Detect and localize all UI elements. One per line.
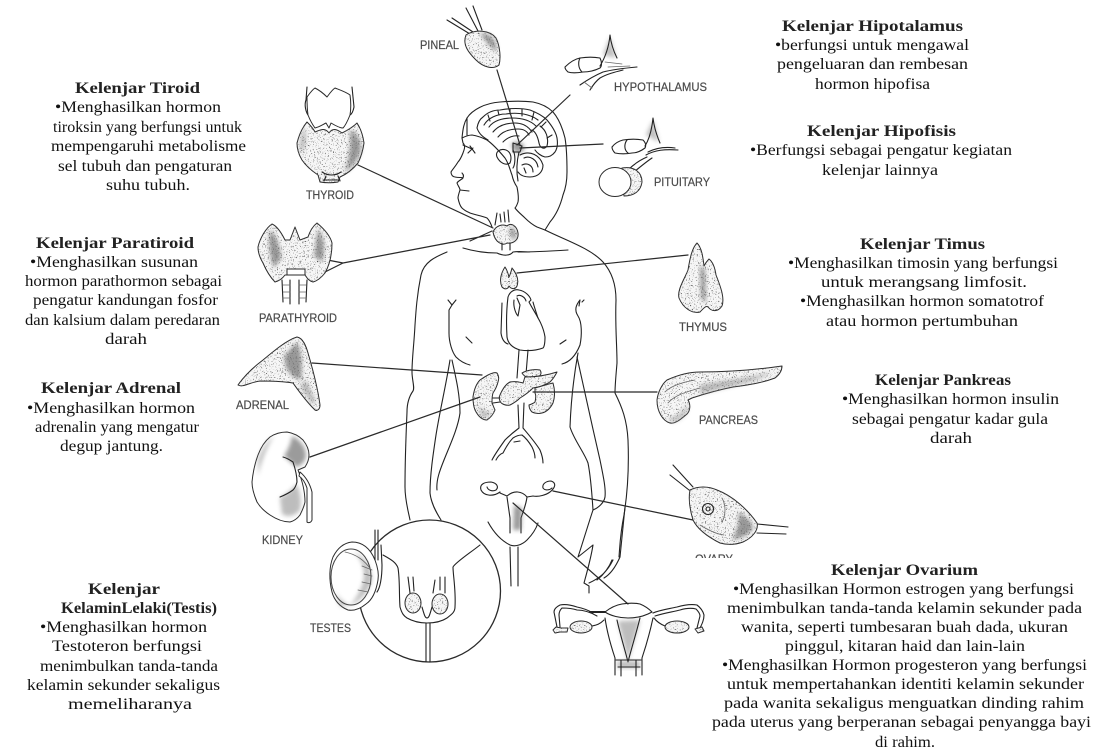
iliac arteries (492, 403, 543, 463)
small pancreas (499, 372, 557, 405)
text block: Kelenjar Paratiroid: •Menghasilkan susunan (30, 254, 198, 271)
anatomical diagram (236, 6, 788, 676)
text block: Kelenjar Tiroid: •Menghasilkan hormon (55, 99, 221, 116)
icon: adrenal (238, 337, 320, 410)
text block: Kelenjar Paratiroid: pengatur kandungan fosfor (33, 292, 219, 309)
text block: Kelenjar Kelamin Lelaki: Testoteron berfungsi (52, 638, 203, 655)
label: thyroid: THYROID (306, 190, 354, 202)
text block: Kelenjar Timus: untuk merangsang limfosit. (821, 274, 1027, 291)
text block: Kelenjar Pankreas (842, 372, 1059, 447)
text block: Kelenjar Tiroid: mempengaruhi metabolisme (51, 138, 246, 155)
icon: pituitary (599, 118, 678, 196)
icon: thymus (679, 243, 723, 312)
body figure outline (405, 101, 628, 593)
text block: Kelenjar Hipotalamus: hormon hipofisa (815, 76, 930, 93)
text block: Kelenjar Paratiroid: darah (105, 331, 147, 348)
label: hypothalamus: HYPOTHALAMUS (614, 82, 707, 94)
icon: large uterus (553, 603, 704, 676)
text block: Kelenjar Pankreas: darah (930, 430, 972, 447)
text block: Kelenjar Hipofisis: Kelenjar Hipofisis (807, 123, 956, 140)
label: pancreas: PANCREAS (699, 415, 758, 427)
label: ovary (cropped): OVARY (695, 554, 733, 566)
text block: Kelenjar Tiroid: Kelenjar Tiroid (75, 80, 200, 97)
text block: Kelenjar Kelamin Lelaki: KelaminLelaki(Testis) (61, 600, 217, 617)
text block: Kelenjar Timus: atau hormon pertumbuhan (826, 313, 1018, 330)
text block: Kelenjar Adrenal: degup jantung. (60, 438, 163, 455)
text block: Kelenjar Ovarium (712, 562, 1092, 751)
icon: kidney (252, 432, 312, 523)
small right kidney (529, 383, 554, 413)
text block: Kelenjar Pankreas: sebagai pengatur kadar gula (852, 411, 1048, 428)
text block: Kelenjar Ovarium: •Menghasilkan Hormon estrogen yang berfungsi (733, 581, 1075, 598)
text block: Kelenjar Ovarium: Kelenjar Ovarium (831, 562, 978, 579)
text block: Kelenjar Timus: •Menghasilkan hormon somatotrof (800, 293, 1045, 310)
label: thymus: THYMUS (679, 322, 727, 334)
text block: Kelenjar Pankreas: Kelenjar Pankreas (875, 372, 1011, 389)
icon: pancreas (657, 366, 782, 423)
text block: Kelenjar Ovarium: untuk mempertahankan identiti kelamin sekunder (727, 676, 1085, 693)
text block: Kelenjar Kelamin Lelaki (27, 581, 220, 713)
small thyroid (493, 224, 518, 244)
icon: pineal gland (447, 6, 500, 67)
text block: Kelenjar Pankreas: •Menghasilkan hormon insulin (842, 391, 1059, 408)
text block: Kelenjar Hipotalamus (775, 18, 969, 93)
text block: Kelenjar Adrenal: Kelenjar Adrenal (41, 380, 182, 397)
heart (507, 290, 545, 351)
text block: Kelenjar Ovarium: wanita, seperti tumbesaran buah dada, ukuran (741, 619, 1068, 636)
text block: Kelenjar Hipofisis (750, 123, 1012, 179)
text block: Kelenjar Timus: Kelenjar Timus (860, 236, 985, 253)
icon: hypothalamus (565, 35, 637, 90)
text block: Kelenjar Ovarium: pinggul, kitaran haid dan lain-lain (785, 638, 1025, 655)
small organs in torso (463, 210, 568, 463)
small upper pancreas lobe (522, 370, 541, 378)
text block: Kelenjar Ovarium: menimbulkan tanda-tanda kelamin sekunder pada (727, 600, 1082, 617)
icon: thyroid (297, 87, 364, 183)
text block: Kelenjar Tiroid: suhu tubuh. (106, 177, 190, 194)
icon: ovary (670, 465, 788, 544)
text block: Kelenjar Adrenal (27, 380, 200, 455)
text block: Kelenjar Ovarium: •Menghasilkan Hormon progesteron yang berfungsi (722, 657, 1088, 674)
text block: Kelenjar Paratiroid: hormon parathormon sebagai (25, 273, 223, 290)
text block: Kelenjar Kelamin Lelaki: Kelenjar (88, 581, 160, 598)
text block: Kelenjar Hipotalamus: Kelenjar Hipotalamus (782, 18, 963, 35)
icon: parathyroid (258, 223, 332, 304)
text block: Kelenjar Tiroid: sel tubuh dan pengaturan (58, 158, 232, 175)
connector lines (310, 70, 693, 604)
text block: Kelenjar Hipotalamus: •berfungsi untuk mengawal (775, 37, 969, 54)
text block: Kelenjar Kelamin Lelaki: •Menghasilkan hormon (40, 619, 207, 636)
text block: Kelenjar Hipofisis: •Berfungsi sebagai pengatur kegiatan (750, 142, 1012, 159)
text block: Kelenjar Adrenal: •Menghasilkan hormon (27, 400, 195, 417)
label: testes: TESTES (310, 623, 351, 635)
text block: Kelenjar Tiroid: tiroksin yang berfungsi untuk (53, 119, 242, 136)
label: pituitary: PITUITARY (654, 177, 710, 189)
icon: enlarged testis (330, 530, 382, 610)
text block: Kelenjar Hipotalamus: pengeluaran dan rembesan (777, 56, 968, 73)
label: adrenal: ADRENAL (236, 400, 290, 412)
text block: Kelenjar Ovarium: pada wanita sekaligus menguatkan dinding rahim (724, 695, 1084, 712)
small left kidney (473, 373, 499, 420)
small uterus in body (481, 481, 555, 586)
label: parathyroid: PARATHYROID (259, 313, 337, 325)
text block: Kelenjar Ovarium: di rahim. (875, 734, 935, 751)
text block: Kelenjar Timus: •Menghasilkan timosin yang berfungsi (788, 255, 1059, 272)
text block: Kelenjar Kelamin Lelaki: kelamin sekunder sekaligus (27, 677, 220, 694)
text block: Kelenjar Hipofisis: kelenjar lainnya (822, 162, 938, 179)
text block: Kelenjar Kelamin Lelaki: memeliharanya (68, 696, 192, 713)
small thymus (501, 267, 518, 289)
text block: Kelenjar Tiroid (51, 80, 246, 194)
text block: Kelenjar Timus (788, 236, 1059, 330)
label: pineal: PINEAL (420, 40, 460, 52)
text block: Kelenjar Paratiroid: dan kalsium dalam peredaran (25, 312, 220, 329)
text block: Kelenjar Paratiroid: Kelenjar Paratiroid (36, 235, 194, 252)
text block: Kelenjar Adrenal: adrenalin yang mengatur (35, 419, 200, 436)
icon: testes magnified circle (358, 520, 500, 662)
text block: Kelenjar Paratiroid (25, 235, 223, 348)
text block: Kelenjar Ovarium: pada uterus yang berperanan sebagai penyangga bayi (712, 714, 1092, 731)
brain (460, 108, 557, 191)
text block: Kelenjar Kelamin Lelaki: menimbulkan tanda-tanda (40, 658, 218, 675)
label: kidney: KIDNEY (262, 535, 303, 547)
